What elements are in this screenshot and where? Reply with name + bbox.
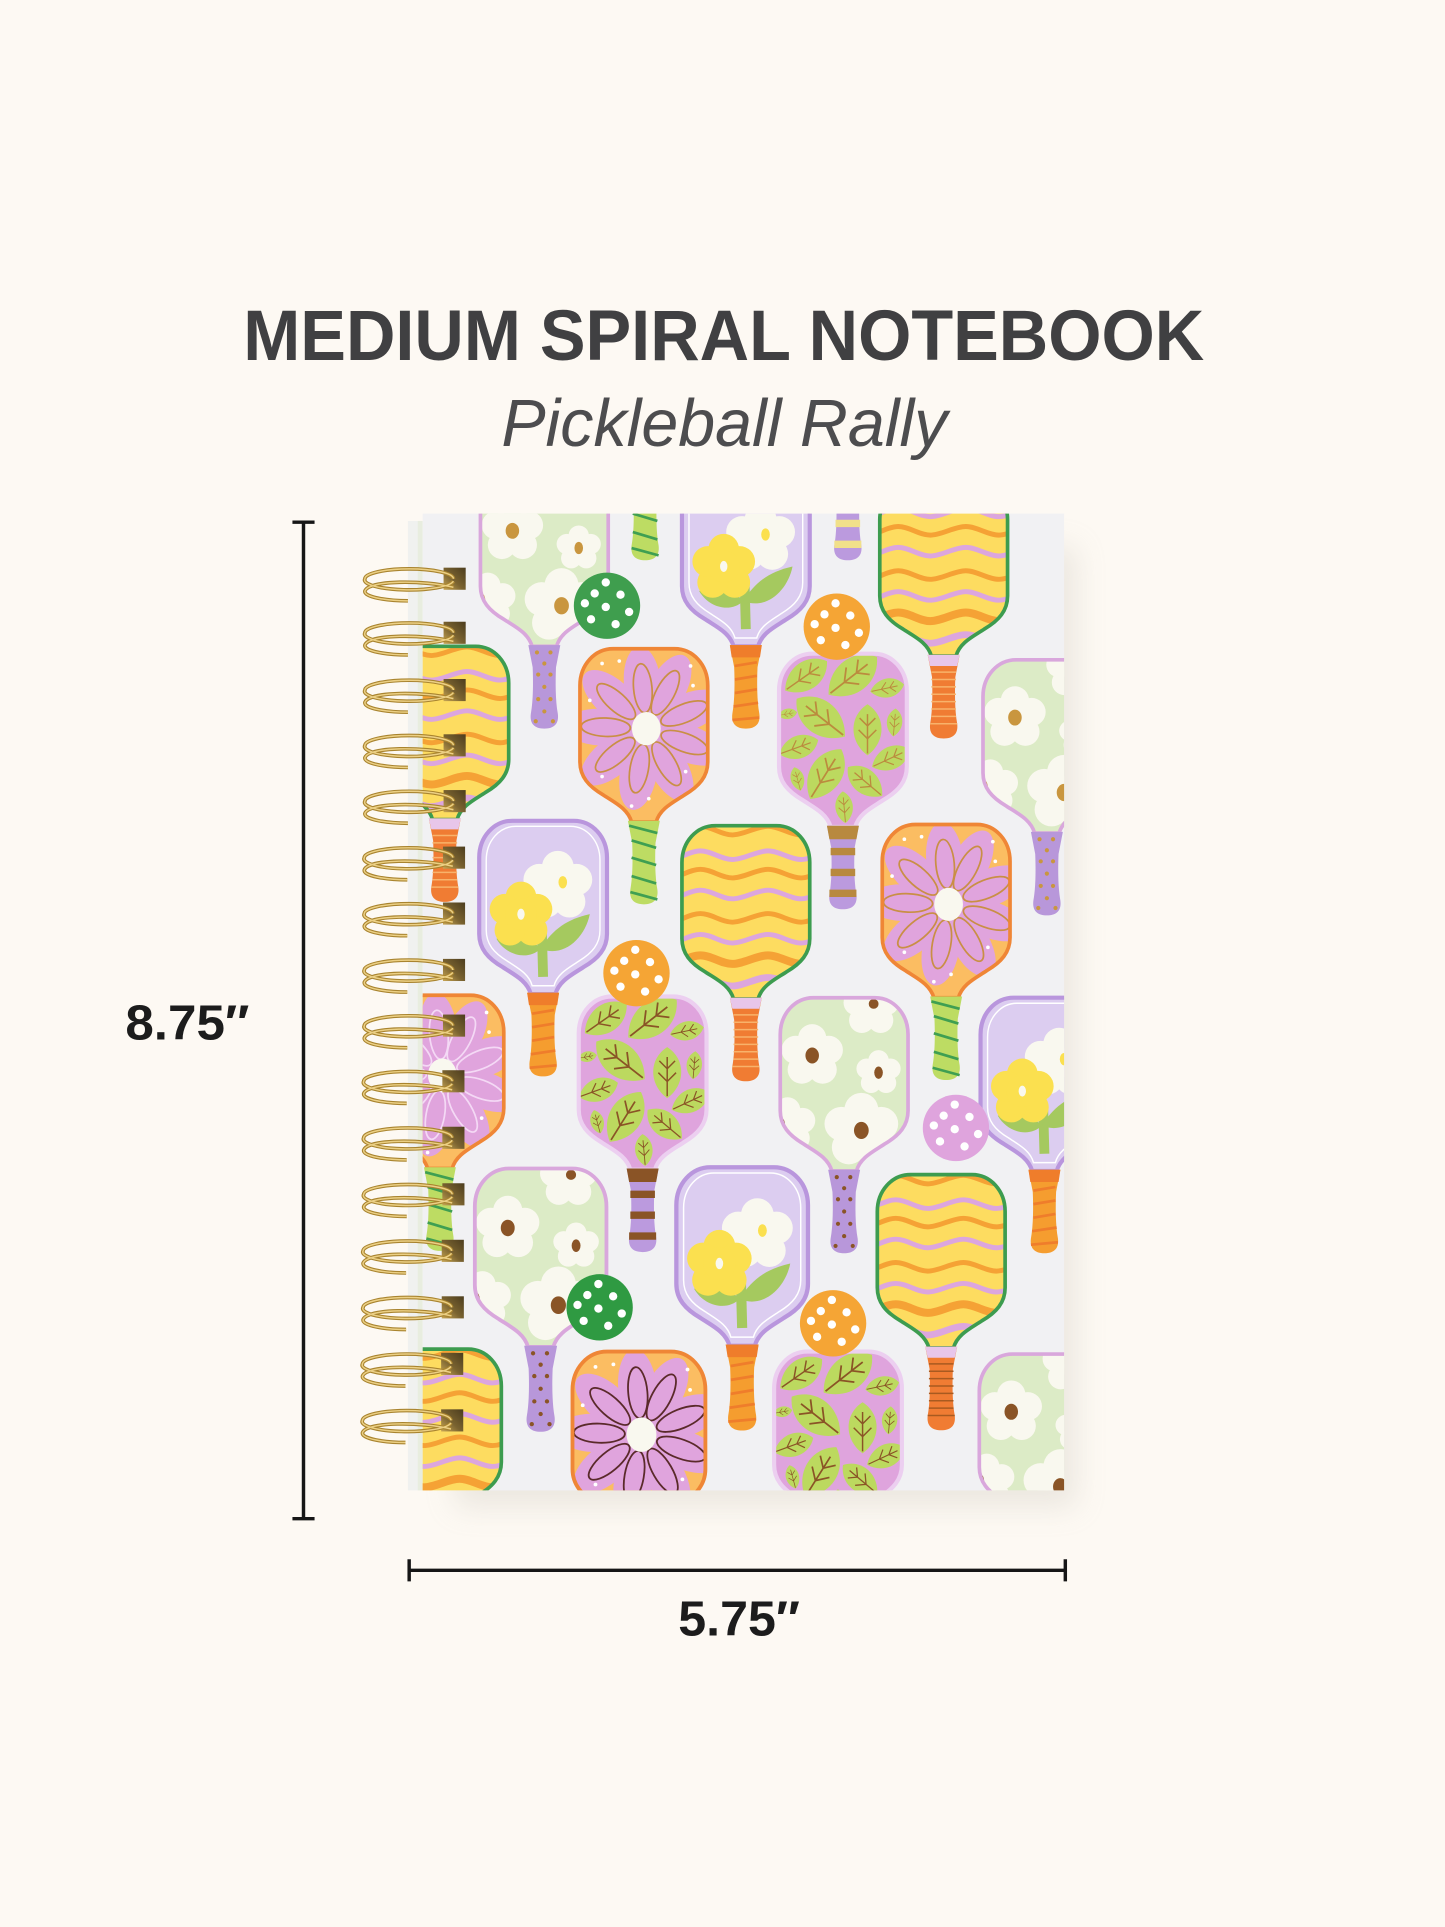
- paddle: lilac flower top: [680, 514, 812, 729]
- ball: green bottom: [566, 1274, 633, 1341]
- paddle: green flowers top: [478, 514, 610, 729]
- infographic canvas: [127, 310, 1204, 1636]
- notebook page edge: [408, 521, 423, 1490]
- paddle: yellow wave bottom left: [422, 1347, 504, 1490]
- spiral binding: [362, 568, 466, 1443]
- paddle: lilac flower row 5: [676, 1167, 808, 1431]
- subtitle: Pickleball Rally: [501, 387, 951, 461]
- paddle: leaves bottom: [772, 1350, 904, 1490]
- width dimension line: [409, 1559, 1065, 1581]
- paddle: daisy left: [422, 993, 506, 1251]
- notebook shadow: [455, 547, 1076, 1508]
- paddle: green flowers bottom: [978, 1352, 1064, 1490]
- ball: orange top: [804, 593, 870, 660]
- paddle: lilac flower right: [978, 996, 1064, 1254]
- paddle: yellow wave top: [878, 514, 1010, 738]
- paddle: yellow wave row 3: [680, 824, 812, 1082]
- paddle: green flowers row 4: [778, 996, 910, 1254]
- cover pattern: [422, 514, 1064, 1490]
- paddle: green flowers row 5: [472, 1166, 608, 1432]
- width label: 5.75″: [678, 1592, 800, 1646]
- paddle: leaves row 2: [775, 644, 914, 909]
- paddle: leaves row 4: [575, 986, 714, 1252]
- title: MEDIUM SPIRAL NOTEBOOK: [243, 296, 1204, 376]
- notebook cover: [423, 514, 1064, 1490]
- paddle: lilac stripe handle top: [834, 514, 862, 560]
- ball: pink: [923, 1095, 989, 1161]
- paddle: green flowers right: [981, 658, 1064, 916]
- page edge tint: [418, 521, 423, 1490]
- height dimension line: [292, 522, 315, 1519]
- paddle: yellow wave row 5: [875, 1172, 1007, 1430]
- paddle: lilac flower row 3: [479, 821, 607, 1076]
- height label: 8.75″: [125, 996, 249, 1050]
- paddle: orange daisy row 2: [578, 646, 710, 904]
- paddle: yellow wave left: [422, 644, 511, 902]
- paddle: orange daisy row 3: [880, 822, 1012, 1080]
- ball: orange bottom: [800, 1290, 866, 1357]
- paddle: green stripe handle top: [631, 514, 659, 560]
- paddle: daisy bottom: [570, 1350, 708, 1490]
- ball: orange middle: [603, 940, 670, 1006]
- ball: green top: [574, 573, 640, 639]
